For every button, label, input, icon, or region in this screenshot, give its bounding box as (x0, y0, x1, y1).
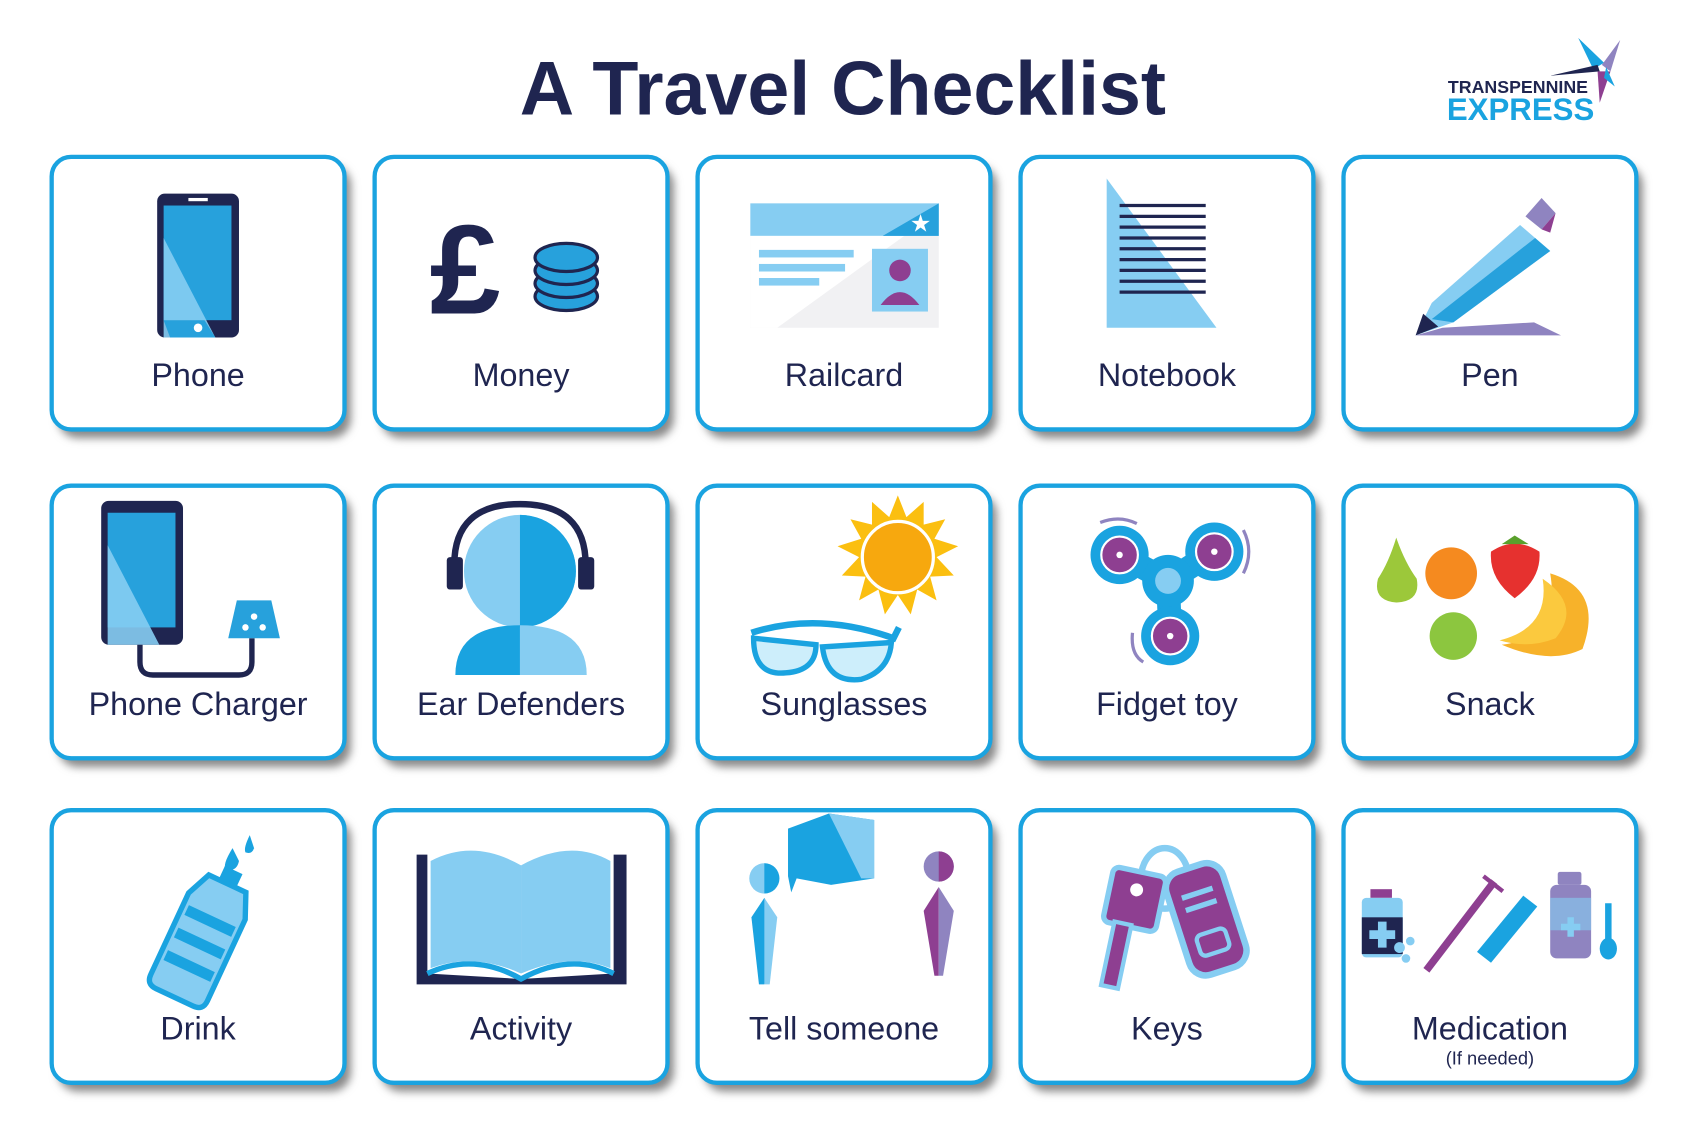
card: Railcard (698, 157, 997, 438)
card: Keys (1021, 810, 1320, 1091)
card: Medication: (If needed) (1446, 1047, 1534, 1068)
icon: pen (1416, 198, 1561, 335)
card: Tell someone (698, 810, 997, 1091)
card: Sunglasses (698, 486, 997, 767)
card: Drink (52, 810, 351, 1091)
title: A Travel Checklist (520, 48, 1166, 132)
icon: two people talking (749, 813, 954, 984)
icon: ear defenders (447, 504, 594, 675)
card: Money (375, 157, 674, 438)
card: Fidget toy: Fidget toy (1096, 686, 1239, 722)
card: Notebook (1021, 157, 1320, 438)
card: Phone Charger (52, 486, 351, 767)
icon: fruit (1377, 535, 1589, 660)
icon: railcard: ★ (910, 211, 931, 238)
card: Notebook: Notebook (1098, 357, 1237, 393)
card: Railcard: Railcard (785, 357, 903, 393)
logo: TransPennine Express: EXPRESS (1447, 92, 1594, 127)
card: Phone: Phone (151, 357, 245, 393)
card: Phone (52, 157, 351, 438)
card: Medication (1344, 810, 1643, 1091)
icon: railcard (750, 203, 939, 328)
card: Money: Money (473, 357, 570, 393)
card: Ear Defenders (375, 486, 674, 767)
card: Keys: Keys (1131, 1010, 1203, 1047)
card: Sunglasses: Sunglasses (761, 686, 927, 722)
card: Phone Charger: Phone Charger (89, 686, 308, 722)
card: Medication: Medication (1412, 1010, 1568, 1047)
card: Snack (1344, 486, 1643, 767)
card: Tell someone: Tell someone (749, 1010, 939, 1047)
card: Snack: Snack (1445, 686, 1536, 722)
icon: pound and coins: £ (430, 198, 500, 341)
icon: phone charger (101, 501, 280, 675)
icon: phone (157, 194, 239, 338)
icon: sun and sunglasses (751, 495, 958, 680)
card: Activity: Activity (470, 1010, 573, 1047)
icon: medication (1362, 872, 1617, 970)
card: Ear Defenders: Ear Defenders (417, 686, 625, 722)
card: Drink: Drink (160, 1010, 237, 1047)
icon: notebook (1107, 178, 1216, 328)
icon: pound and coins (430, 198, 597, 341)
logo: TransPennine Express: TRANSPENNINE (1448, 77, 1588, 97)
card: Activity (375, 810, 674, 1091)
card: Pen: Pen (1461, 357, 1519, 393)
icon: water bottle (146, 835, 262, 1011)
icon: fidget spinner (1091, 519, 1249, 665)
card: Pen (1344, 157, 1643, 438)
logo: TransPennine Express (1447, 38, 1620, 127)
icon: open book (417, 851, 627, 984)
icon: keys (1089, 848, 1251, 994)
card: Fidget toy (1021, 486, 1320, 767)
